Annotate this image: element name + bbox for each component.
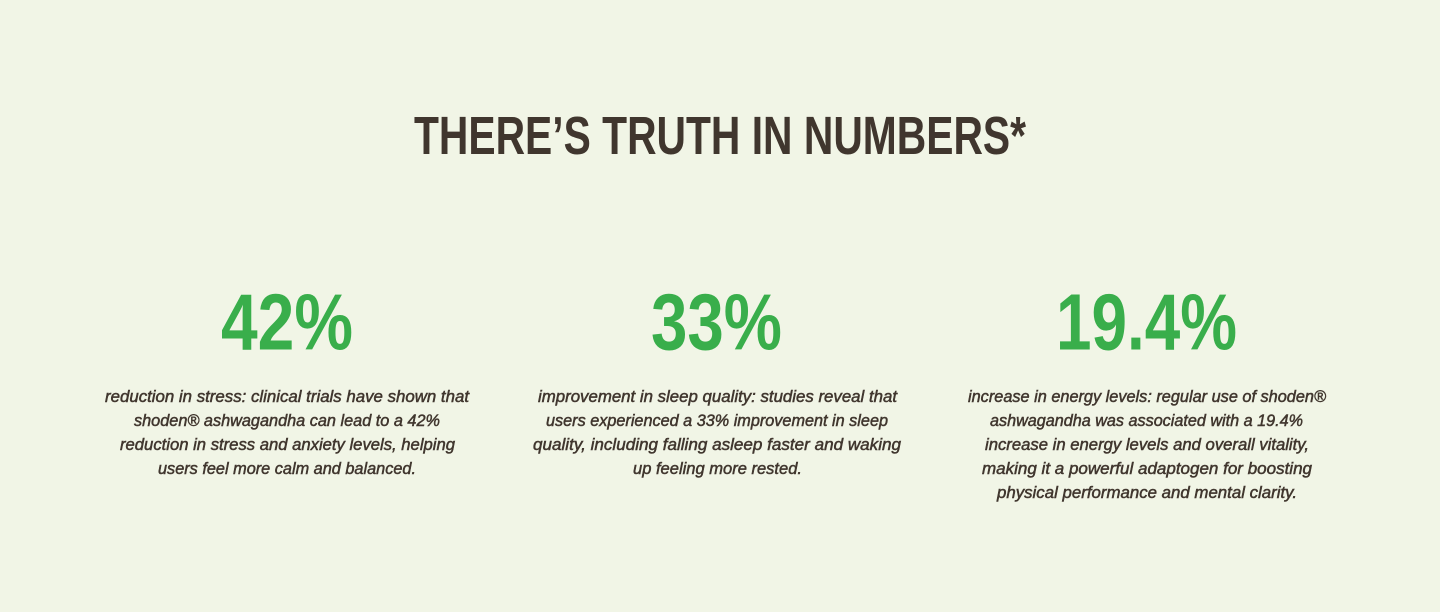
description: energy: physical performance and mental clarity. <box>996 484 1297 502</box>
description: energy <box>968 388 1327 502</box>
description: energy: increase in energy levels: regular use of shoden® <box>968 388 1327 406</box>
panel: stress statistic <box>105 278 470 478</box>
description: sleep: up feeling more rested. <box>633 460 802 478</box>
description: energy: increase in energy levels and overall vitality, <box>985 436 1309 454</box>
description: sleep: users experienced a 33% improvement in sleep <box>546 412 888 430</box>
panel: sleep statistic <box>533 278 902 478</box>
description: stress: users feel more calm and balanced. <box>158 460 416 478</box>
description: energy: making it a powerful adaptogen for boosting <box>982 460 1313 478</box>
description: sleep <box>533 388 902 478</box>
description: sleep: quality, including falling asleep faster and waking <box>533 436 902 454</box>
stat number: 19.4%: 19.4% <box>1056 278 1237 366</box>
description: stress: reduction in stress: clinical trials have shown that <box>105 388 470 406</box>
description: stress: reduction in stress and anxiety levels, helping <box>120 436 456 454</box>
title: THERE’S TRUTH IN NUMBERS* <box>414 106 1026 166</box>
description: stress: shoden® ashwagandha can lead to a 42% <box>134 412 440 430</box>
stat number: 42%: 42% <box>221 278 353 366</box>
stat number: 33%: 33% <box>651 278 782 366</box>
description: stress <box>105 388 470 478</box>
panel: energy statistic <box>968 278 1327 502</box>
description: energy: ashwagandha was associated with a 19.4% <box>990 412 1303 430</box>
description: sleep: improvement in sleep quality: studies reveal that <box>538 388 898 406</box>
